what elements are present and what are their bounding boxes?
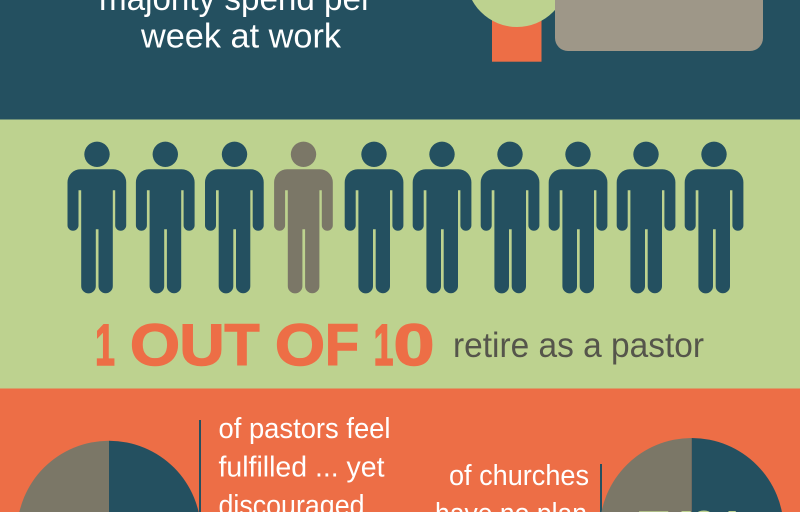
text: week at work: week at work xyxy=(140,18,342,56)
text: churches no plan: of churches xyxy=(449,460,589,492)
icon: green circle xyxy=(466,0,568,27)
text: pastors fulfilled: of pastors feel xyxy=(218,413,390,445)
pictogram: ten people xyxy=(68,142,743,293)
person 5 xyxy=(345,142,403,293)
person 9 xyxy=(617,142,675,293)
heading: 1 out of 10: 1 xyxy=(95,313,115,378)
heading: 1 out of 10: 0 xyxy=(394,313,434,378)
pie chart: pastors fulfilled xyxy=(17,440,201,512)
person 4 highlighted xyxy=(274,142,333,293)
person 6 xyxy=(413,142,471,293)
heading: 1 out of 10: U xyxy=(180,313,224,378)
person 7 xyxy=(481,142,539,293)
person 2 xyxy=(136,142,195,293)
heading: 1 out of 10: T xyxy=(224,313,260,378)
panel: 1 out of 10 xyxy=(0,120,800,388)
person 3 xyxy=(205,142,264,293)
text: churches no plan xyxy=(435,460,589,512)
text: retire as a pastor: retire as a pastor xyxy=(453,326,704,365)
heading: 1 out of 10: F xyxy=(325,313,359,378)
text: pastors fulfilled xyxy=(218,413,390,512)
heading: 1 out of 10: 1 xyxy=(374,313,394,378)
panel: statistics xyxy=(19,417,782,512)
pie chart: churches no plan xyxy=(599,437,784,512)
icon: orange post xyxy=(492,0,542,62)
divider right xyxy=(600,464,602,512)
heading: 1 out of 10: O xyxy=(275,313,325,378)
text: pastors fulfilled: fulfilled ... yet xyxy=(218,452,384,484)
person 10 xyxy=(685,142,743,293)
person 8 xyxy=(549,142,607,293)
panel: hours at work xyxy=(0,0,800,120)
heading: 1 out of 10: O xyxy=(130,313,180,378)
text: week at work xyxy=(99,0,372,56)
person 1 xyxy=(68,142,126,293)
divider left xyxy=(199,420,201,512)
icon: grey rounded panel xyxy=(555,0,763,51)
